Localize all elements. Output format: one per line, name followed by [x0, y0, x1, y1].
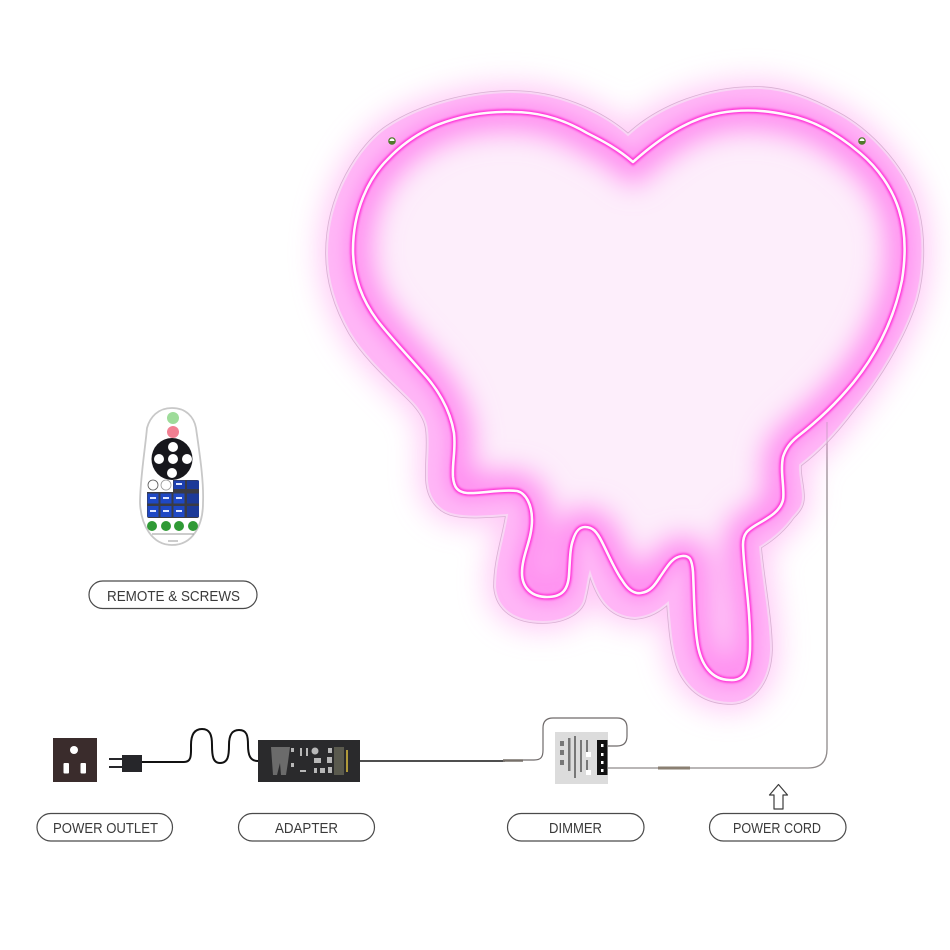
green buttons row — [147, 521, 198, 531]
red button — [167, 426, 179, 438]
label: power cord: POWER CORD — [733, 820, 821, 837]
label: adapter: ADAPTER — [275, 820, 338, 837]
blue button grid — [147, 480, 199, 518]
mounting screw left — [388, 137, 396, 145]
remote control — [140, 408, 203, 545]
label: power outlet: POWER OUTLET — [53, 820, 158, 837]
acrylic backing plate edge — [327, 88, 922, 703]
label: remote and screws: REMOTE & SCREWS — [107, 588, 240, 605]
remote body — [140, 408, 203, 545]
label: remote and screws — [89, 581, 257, 608]
power cord vertical run and connector — [608, 440, 827, 768]
neon tube core — [353, 111, 905, 680]
dimmer — [555, 732, 608, 784]
label: dimmer: DIMMER — [549, 820, 602, 837]
arrow: points to power cord — [770, 784, 788, 809]
icon: power outlet — [53, 738, 97, 782]
plate tint around neon — [353, 111, 905, 680]
adapter — [258, 740, 360, 782]
cord seen through plate — [826, 422, 828, 443]
outer pink glow — [327, 88, 922, 703]
adapter output cable — [360, 760, 523, 762]
pale heart interior — [372, 130, 886, 676]
icon: plug — [109, 755, 142, 772]
neon tube halo — [353, 111, 905, 680]
acrylic backing plate — [327, 88, 922, 703]
neon melting heart sign — [327, 88, 922, 703]
label: adapter — [238, 814, 374, 841]
label: power outlet — [37, 814, 172, 841]
label: power cord — [710, 814, 846, 841]
green button — [167, 412, 179, 424]
dimmer loop cable — [523, 718, 627, 760]
mounting screw right — [858, 137, 866, 145]
label: dimmer — [508, 814, 644, 841]
remote footer line — [152, 534, 194, 541]
black direction pad — [152, 438, 192, 480]
adapter input cable — [142, 729, 258, 763]
